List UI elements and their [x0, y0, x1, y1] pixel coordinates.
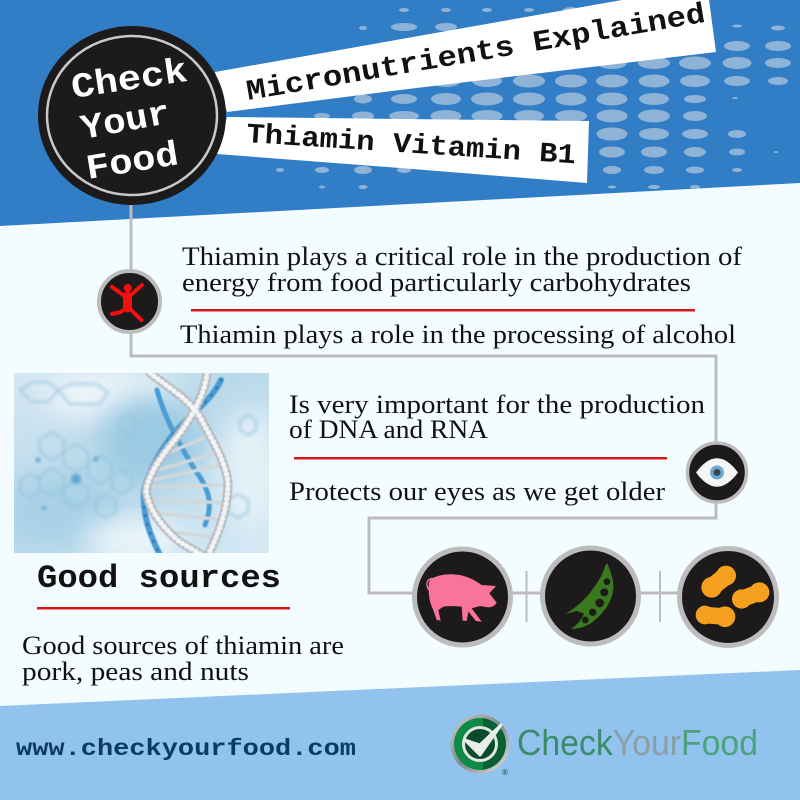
banner: Thiamin Vitamin B1: Thiamin Vitamin B1 — [245, 120, 577, 172]
icon: pig — [414, 549, 510, 645]
text: good sources of thiamin — [22, 631, 344, 686]
text: DNA and RNA — [289, 390, 705, 444]
text: energy production — [182, 242, 742, 297]
banner: Thiamin Vitamin B1 — [217, 117, 589, 183]
badge: Check Your Food — [38, 26, 226, 205]
logo: CheckYourFood: ® — [502, 768, 508, 777]
icon: red running figure — [99, 271, 160, 332]
heading: Good sources: Good sources — [37, 560, 281, 597]
connector lines — [131, 200, 716, 622]
icon: eye — [688, 443, 746, 502]
banner: Micronutrients Explained: Micronutrients Explained — [244, 0, 708, 109]
red divider 2 — [294, 457, 667, 460]
badge: Check Your Food: Check — [69, 52, 190, 109]
text: energy production: Thiamin plays a critical role in the production of — [182, 242, 742, 271]
icon: pea pod — [542, 548, 638, 644]
badge: Check Your Food: Your — [78, 94, 173, 150]
icon: nuts — [680, 548, 776, 646]
text: protects eyes: Protects our eyes as we get older — [289, 477, 665, 506]
footer blue band — [0, 670, 800, 800]
text: alcohol processing: Thiamin plays a role in the processing of alcohol — [180, 320, 736, 349]
halftone dot pattern — [276, 7, 791, 189]
blue back strands — [144, 380, 221, 555]
white front strands — [146, 373, 228, 555]
text: good sources of thiamin: Good sources of thiamin are — [22, 631, 344, 660]
text: energy production: energy from food particularly carbohydrates — [182, 268, 691, 297]
text: good sources of thiamin: pork, peas and nuts — [22, 657, 249, 686]
text: DNA and RNA: Is very important for the production — [289, 390, 705, 419]
faded molecule structures — [20, 382, 256, 518]
text: DNA and RNA: of DNA and RNA — [289, 415, 488, 444]
image: DNA helix — [14, 373, 269, 553]
website url: www.checkyourfood.com — [16, 736, 356, 762]
logo: CheckYourFood: CheckYourFood — [517, 722, 758, 763]
red divider 1 — [191, 309, 695, 312]
logo: CheckYourFood — [450, 714, 758, 777]
white rungs — [146, 434, 226, 537]
badge: Check Your Food: Food — [83, 135, 182, 190]
logo emblem — [450, 714, 510, 774]
header blue band — [0, 0, 800, 226]
red divider 3 — [37, 607, 290, 610]
